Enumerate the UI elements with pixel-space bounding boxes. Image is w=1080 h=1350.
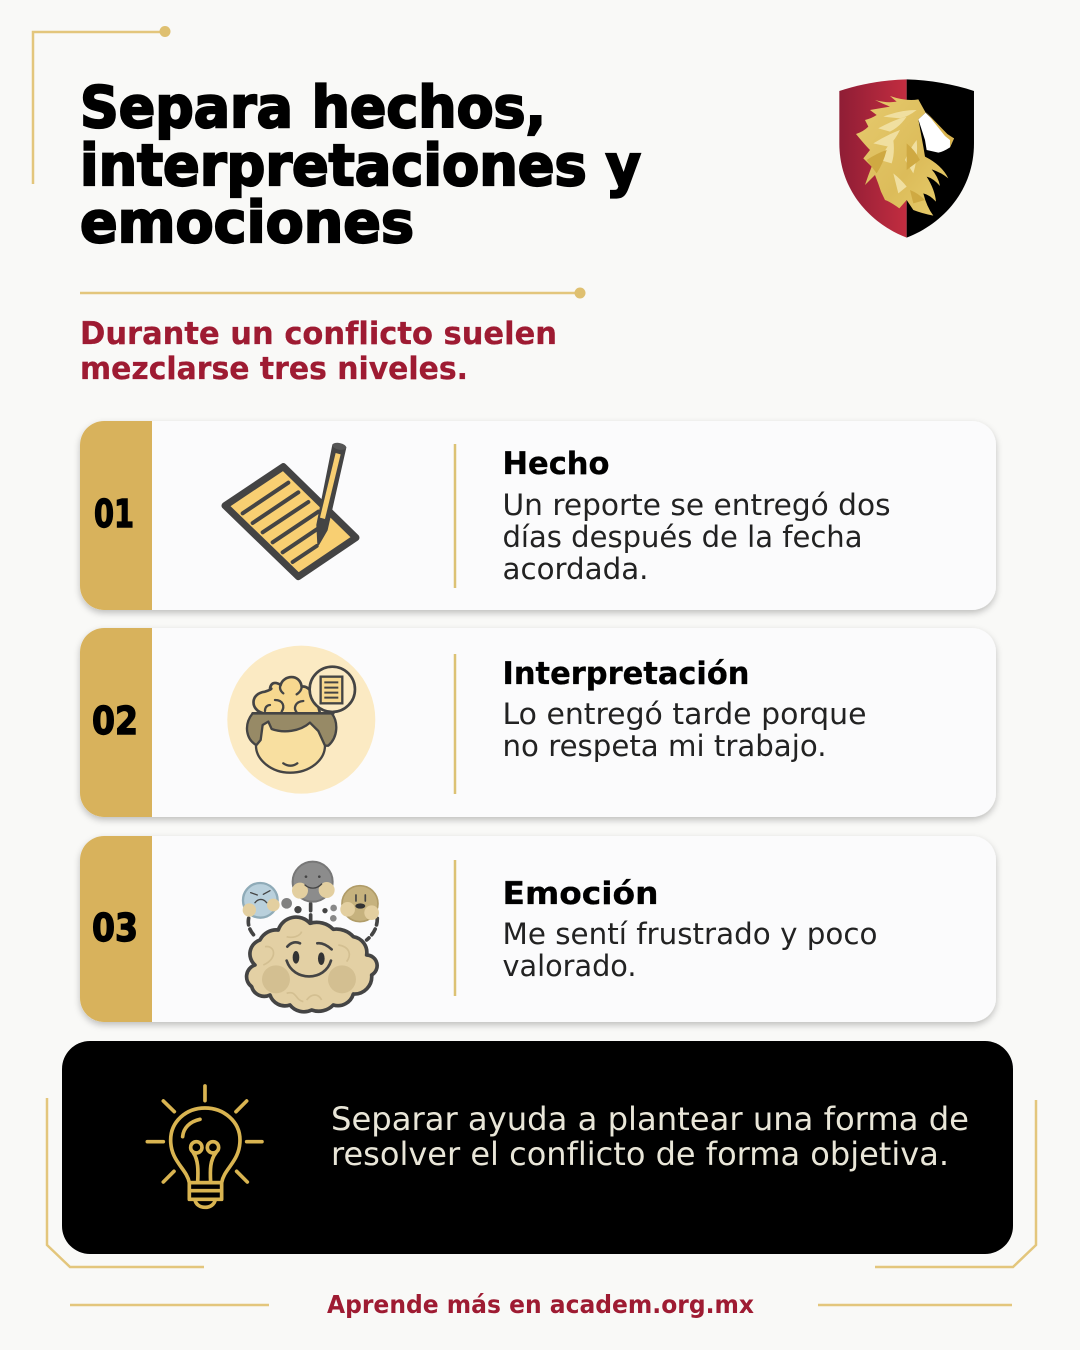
card text: Hecho: Hecho: [502, 446, 610, 482]
footer link: Aprende más en academ.org.mx: [327, 1290, 754, 1319]
card text: Interpretación: no respeta mi trabajo.: [502, 729, 826, 763]
number badge 01: 01: [94, 492, 134, 536]
callout text: resolver el conflicto de forma objetiva.: [331, 1135, 949, 1173]
card text: Hecho: acordada.: [502, 552, 648, 586]
callout text: [331, 1100, 969, 1173]
card text: Interpretación: Lo entregó tarde porque: [502, 697, 866, 731]
card text: Interpretación: [502, 656, 866, 763]
title: emociones: [80, 190, 414, 256]
icon: head with brain and document: [227, 646, 375, 794]
title: [80, 75, 641, 256]
card text: Emoción: Emoción: [502, 876, 658, 912]
title: interpretaciones y: [80, 133, 641, 199]
number badge 03: 03: [92, 906, 138, 950]
card text: Emoción: Me sentí frustrado y poco: [502, 917, 878, 951]
card text: Emoción: valorado.: [502, 949, 636, 983]
panel: card 01 Hecho: [80, 421, 996, 610]
title: Separa hechos,: [80, 75, 546, 141]
icon: brain with emotions: [243, 862, 379, 1012]
icon: notepad and pencil: [225, 442, 356, 577]
number badge 03: [80, 836, 152, 1022]
card text: Hecho: [502, 446, 890, 586]
number badge 01: [80, 421, 152, 610]
panel: conclusion callout: [62, 1041, 1013, 1254]
card text: Hecho: Un reporte se entregó dos: [502, 488, 890, 522]
tan face: [340, 886, 379, 922]
number badge 02: [80, 628, 152, 817]
subtitle: [80, 316, 557, 387]
card text: Hecho: días después de la fecha: [502, 520, 862, 554]
blue face: [243, 883, 280, 918]
subtitle: Durante un conflicto suelen: [80, 316, 557, 352]
panel: card 03 Emoción: [80, 836, 996, 1022]
callout text: Separar ayuda a plantear una forma de: [331, 1100, 969, 1138]
icon: lightbulb: [147, 1086, 262, 1207]
icon: lion shield logo: [839, 79, 974, 238]
card text: Interpretación: Interpretación: [502, 656, 750, 692]
number badge 02: 02: [92, 699, 138, 743]
subtitle: mezclarse tres niveles.: [80, 351, 468, 387]
panel: card 02 Interpretación: [80, 628, 996, 817]
card text: Emoción: [502, 876, 878, 983]
gray face: [292, 862, 335, 902]
